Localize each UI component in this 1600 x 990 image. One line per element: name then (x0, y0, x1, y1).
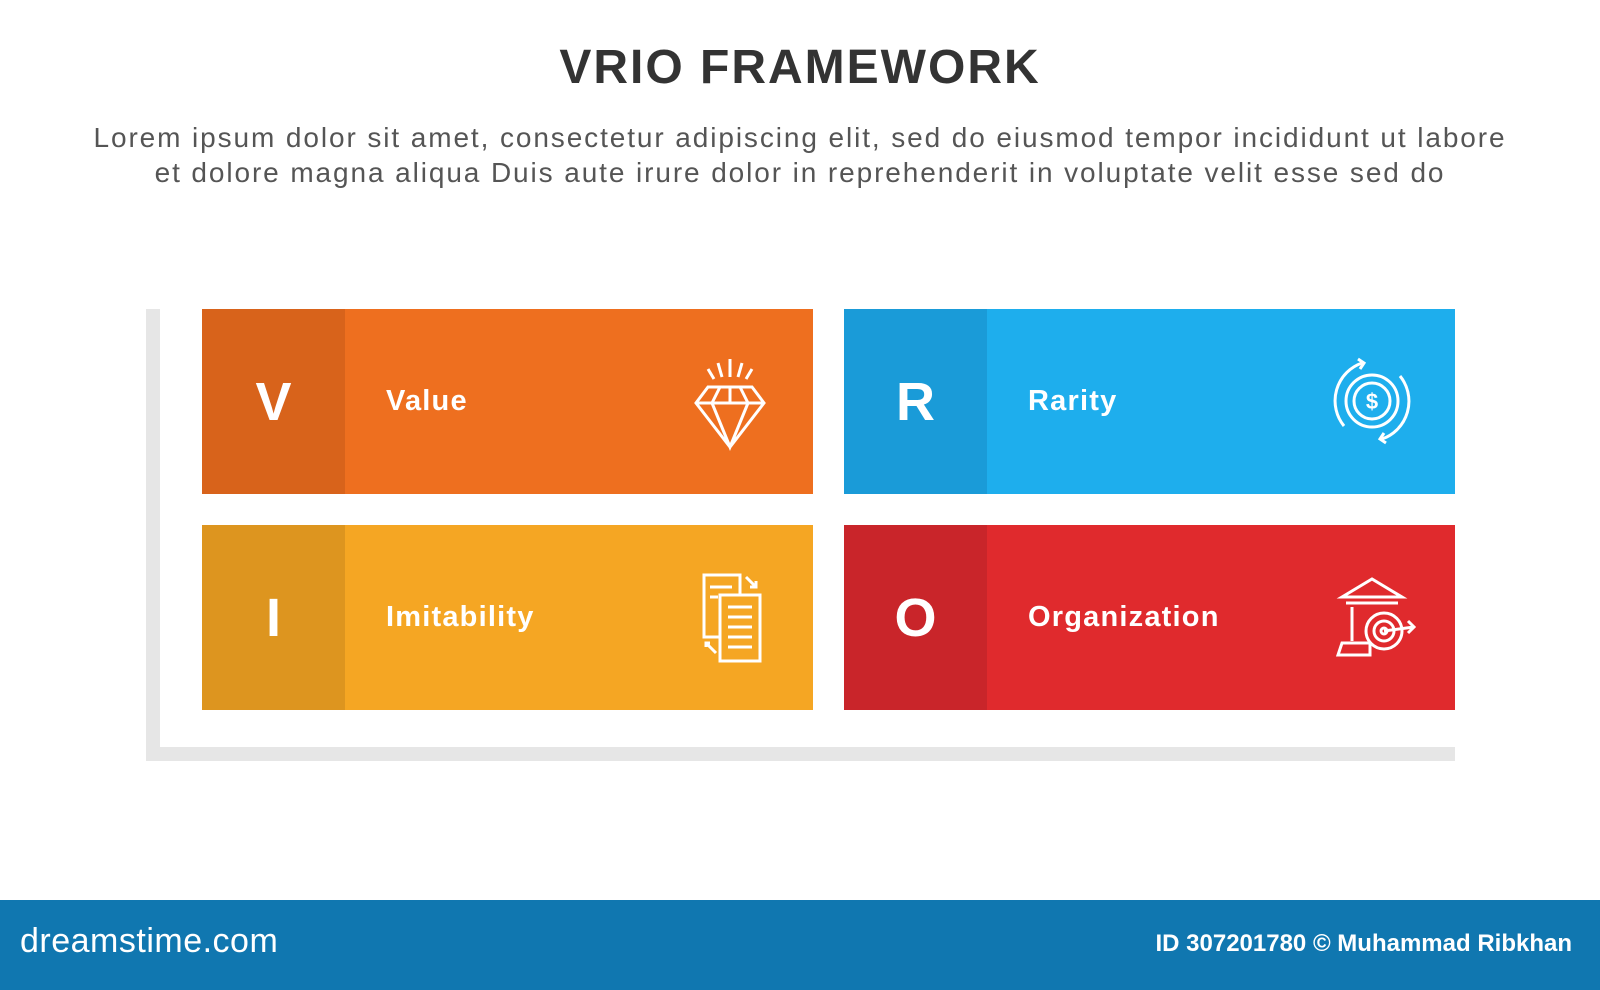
panel: value: V (255, 372, 292, 432)
panel: value (202, 309, 813, 494)
panel: imitability: Imitability (386, 601, 535, 633)
icon: coin cycle (1334, 358, 1410, 444)
footer logo text: dreamstime.com (20, 922, 278, 960)
subtitle text: Lorem ipsum dolor sit amet, consectetur adipiscing elit, sed do eiusmod tempor incididunt ut labore (94, 122, 1506, 153)
icon: coin cycle: $ (1366, 389, 1378, 414)
icon: diamond (694, 359, 766, 451)
panel: imitability (202, 525, 813, 710)
panel: organization: O (894, 588, 936, 648)
subtitle text: et dolore magna aliqua Duis aute irure dolor in reprehenderit in voluptate velit esse sed do (155, 157, 1445, 188)
footer bar (0, 900, 1600, 990)
axis frame (146, 309, 1455, 761)
panel: organization (844, 525, 1455, 710)
panel: rarity: R (896, 372, 935, 432)
panel: rarity (844, 309, 1455, 494)
panel: organization: Organization (1028, 601, 1220, 633)
panel: value: Value (386, 385, 468, 417)
panel: imitability: I (266, 588, 281, 648)
subtitle text (94, 122, 1506, 188)
panel: rarity: Rarity (1028, 385, 1117, 417)
footer credit: ID 307201780 © Muhammad Ribkhan (1155, 930, 1572, 957)
title: VRIO FRAMEWORK (559, 41, 1041, 94)
icon: documents (702, 574, 762, 662)
icon: bank target (1336, 577, 1416, 656)
